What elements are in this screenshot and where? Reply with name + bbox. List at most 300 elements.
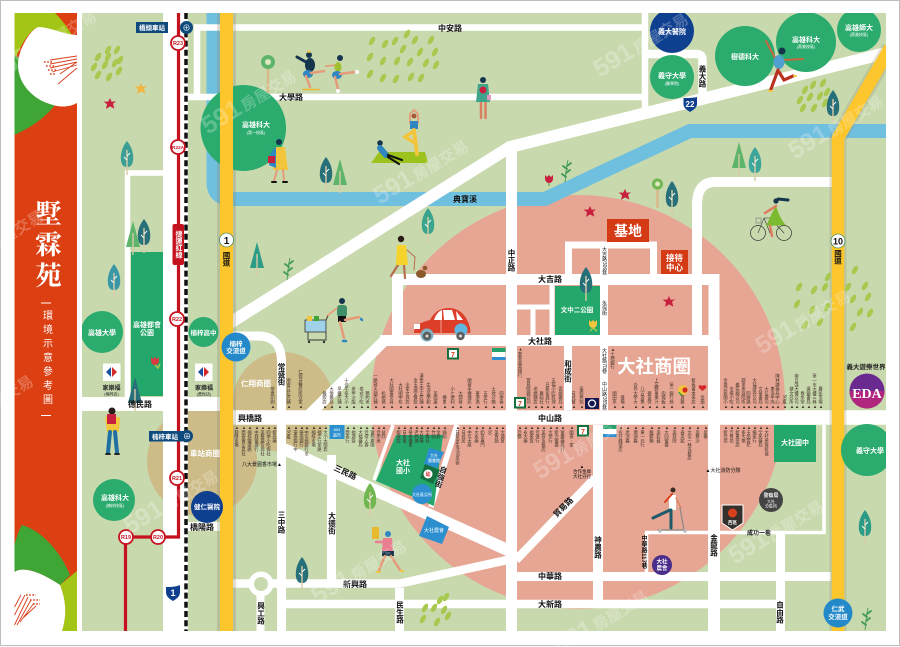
people [105, 41, 803, 572]
icon: Carrefour 鼎悅店: (鼎悅店) [197, 390, 212, 396]
road labels: 神農路 [593, 534, 602, 559]
rail station: 橋頭車站: 橋頭車站 [139, 23, 166, 32]
road labels: 中正路 [507, 247, 516, 272]
icon: 警察局: 分駐所 [765, 502, 777, 508]
station R23 [171, 36, 185, 50]
road labels: 中安路 [438, 23, 462, 33]
road labels: 合作金庫 [573, 468, 591, 475]
shop list north of Zhongshan Rd: 上品鮮果果汁▲ [654, 377, 660, 409]
shop list north of Zhongshan Rd: 春水堂▲ [800, 390, 806, 409]
shop list north of Zhongshan Rd: 寶島眼鏡公司▲ [526, 377, 532, 409]
shop list south of Zhongshan Rd: ▲虎河鑫 [625, 425, 630, 444]
watermarks: 591房屋交易 [196, 60, 301, 140]
shop list north of Zhongshan Rd: 蛋糕烘焙▲ [579, 386, 584, 409]
zone label: 車站商圈: 車站商圈 [190, 448, 220, 458]
shop list south of Zhongshan Rd: ▲美食鍋 [494, 425, 500, 444]
roundabout [248, 572, 274, 596]
shield: national highway 10 [831, 234, 845, 266]
building: 大社圖書館 [424, 448, 444, 468]
campus: 高雄科大 燕巢校區 [776, 12, 836, 72]
shop list north of Zhongshan Rd: 五金行▲ [483, 391, 488, 409]
shop list south of Zhongshan Rd: ▲大昌藥 [419, 425, 424, 444]
shield: route 22 [684, 97, 697, 112]
shop list south of Zhongshan Rd: ▲新佳坊 [723, 425, 728, 444]
river: 典寶溪 [214, 13, 886, 199]
shop list south of Zhongshan Rd: ▲大福藥局 [358, 425, 364, 449]
shop list north of Zhongshan Rd: 藍色書本來店▲ [691, 377, 696, 409]
road labels: 中華路117巷 [640, 534, 647, 569]
shop list south of Zhongshan Rd: ▲美髮沙 [695, 425, 700, 443]
shop list north of Zhongshan Rd: 仁德牙醫診所宜家▲ [298, 368, 304, 409]
campus: 義守大學 醫學院: 義守大學 [658, 71, 686, 80]
shop list south of Zhongshan Rd: ▲楠梓鐵道路 [247, 425, 252, 453]
left banner [14, 13, 77, 631]
school: 大社國小: 國小 [396, 466, 410, 475]
shop list north of Zhongshan Rd: 道場▲ [620, 394, 626, 409]
person: skateboarder [297, 50, 324, 90]
shop list north of Zhongshan Rd: 四維路▲ [746, 391, 752, 409]
shop list north of Zhongshan Rd: 簡約美▲ [365, 390, 370, 409]
shop list south of Zhongshan Rd: ▲日新堂生活50美容 [455, 425, 460, 466]
trees [108, 90, 871, 591]
shop list south of Zhongshan Rd: ▲全民藥局 [758, 425, 764, 449]
flower top: white petals [18, 27, 77, 107]
shop list north of Zhongshan Rd: 松柏嶺▲ [381, 390, 386, 409]
shop list north of Zhongshan Rd: 土地公廟▲ [491, 386, 496, 409]
icon: flower shop logo [678, 385, 688, 395]
school: 大社國中: 大社國中 [781, 438, 809, 447]
shop list south of Zhongshan Rd: ▲佳禾美 [376, 425, 382, 444]
park: 高雄都會公園 [131, 252, 163, 396]
shop list south of Zhongshan Rd: ▲中興電器行 [254, 425, 260, 453]
shop list south of Zhongshan Rd: ▲新力電器 [554, 425, 560, 449]
shield: route 1: 1 [170, 588, 176, 598]
station R19 [119, 530, 133, 544]
shield: route 22: 22 [686, 100, 695, 109]
shop list north of Zhongshan Rd: 四季春▲ [499, 391, 504, 409]
building: 大社區公所 [412, 484, 432, 504]
icon: 854超市: 854 [334, 427, 341, 432]
shop list north of Zhongshan Rd: ▲安泰商業銀行 [517, 346, 523, 379]
person: woman in blue jacket [268, 139, 288, 182]
shop list south of Zhongshan Rd: ▲中信大廈 [467, 425, 472, 448]
campus: 義守大學 [841, 424, 886, 476]
campus: 高雄師大 燕巢校區: 高雄師大 [845, 23, 873, 32]
station R23: R23 [173, 41, 183, 47]
icon: 大社農會: 大社 [656, 558, 668, 566]
campus: 高雄科大 楠梓校區 [93, 479, 135, 521]
site marker: 基地 [607, 219, 649, 242]
icon: police badge 大社消防分隊: 西區 [728, 520, 737, 526]
shield: national highway 10: 國道 [833, 249, 842, 266]
icon: 854超市 [330, 425, 344, 439]
shop list south of Zhongshan Rd: ▲大信一巷洗髮店 [687, 425, 692, 462]
shop list south of Zhongshan Rd: ▲多大樂 [741, 425, 746, 444]
shop list south of Zhongshan Rd: ▲鼎泰行 [345, 425, 350, 444]
shop list north of Zhongshan Rd: 一路發火鍋店鋪▲ [373, 374, 378, 409]
shop list north of Zhongshan Rd: 國田米▲ [612, 391, 618, 409]
building: 大社農會: 大社農會 [424, 527, 444, 534]
shop list south of Zhongshan Rd: ▲吉食坊 [729, 425, 734, 444]
road labels: 金龍路 [709, 532, 718, 557]
road labels: 自由路 [775, 599, 784, 624]
shop list south of Zhongshan Rd: ▲華南銀行 [299, 425, 304, 449]
tan zone: 仁翔商圈 [233, 352, 333, 452]
shop list north of Zhongshan Rd: 第一銀行商▲ [669, 381, 674, 409]
shield: national highway 1 [220, 233, 234, 268]
park: 高雄都會公園: 公園 [140, 328, 154, 337]
shop list south of Zhongshan Rd: ▲佳達行 [535, 425, 540, 444]
metro red line [126, 13, 178, 631]
shopping cart [305, 316, 328, 343]
shop list north of Zhongshan Rd: 陳林牌藥局中心▲ [775, 373, 780, 409]
shop list north of Zhongshan Rd: 金蘭▲ [700, 394, 706, 409]
road labels: 自強街 [433, 464, 449, 490]
person: woman with book [105, 408, 120, 454]
shop list north of Zhongshan Rd: 日新家具行▲ [545, 382, 550, 409]
shop list south of Zhongshan Rd: ▲50嵐 [286, 425, 292, 441]
interchange: 仁武交流道: 仁武 [832, 604, 845, 613]
school: 大社國中 [774, 425, 816, 462]
icon: 7-Eleven south: 7 [581, 429, 585, 436]
watermarks: 591房屋交易 [306, 530, 411, 610]
road labels: 中山路 [538, 413, 562, 423]
subtitle: 環境示意參考圖 [40, 310, 52, 408]
shop list north of Zhongshan Rd: 餐飲店▲ [322, 390, 328, 409]
icon: Carrefour 鼎悅店: 家樂福 [195, 384, 213, 392]
campus: 義守大學: 義守大學 [856, 446, 884, 455]
watermarks: 591房屋交易 [528, 405, 633, 485]
station R20: R20 [153, 535, 163, 541]
shop list south of Zhongshan Rd: ▲富康藥局行 [560, 425, 566, 453]
flower top: green leaf [14, 55, 55, 135]
flower bottom: green leaf [14, 525, 70, 585]
building: 大社圖書館: 大社 [430, 452, 438, 458]
shop list north of Zhongshan Rd: 合作大學大▲ [633, 381, 638, 409]
rail station: 楠梓車站 [149, 430, 193, 442]
title: 墅霖苑 [31, 200, 61, 292]
shop list south of Zhongshan Rd: ▲國泰．家 [569, 425, 574, 448]
shop list north of Zhongshan Rd: 老媽麵店▲ [533, 386, 538, 409]
school: 楠梓高中 [188, 317, 218, 347]
icon: EDA theme park: 義大遊樂世界 [846, 362, 886, 371]
road labels: 新興路 [343, 579, 367, 589]
road labels: 大社路70巷 [601, 348, 607, 374]
shop list north of Zhongshan Rd: 早餐店舖▲ [337, 387, 342, 409]
station R21 [170, 471, 184, 485]
tan zone: 車站商圈 [147, 406, 257, 516]
watermarks: 591房屋交易 [588, 3, 693, 83]
shop list south of Zhongshan Rd: ▲興隆市場 [234, 425, 240, 449]
station R22A: R22A [172, 145, 185, 151]
shop list south of Zhongshan Rd: ▲大榮行 [548, 425, 554, 444]
shop list south of Zhongshan Rd: ▲亞都 [517, 425, 522, 440]
watermarks: 591房屋交易 [118, 460, 223, 540]
campus: 高雄科大 第一校區: (第一校區) [247, 129, 266, 135]
person: roller skater [326, 55, 359, 93]
station R22A [171, 140, 185, 154]
shop list north of Zhongshan Rd: 大福證券公司▲ [752, 377, 758, 409]
shop list south of Zhongshan Rd: ▲福全行家路 [317, 425, 322, 453]
shop list north of Zhongshan Rd: 美而康▲ [433, 390, 438, 409]
shop list north of Zhongshan Rd: 十佳牛排大小▲ [344, 377, 350, 409]
station R22 [170, 312, 184, 326]
sales centre marker: 接待中心: 中心 [666, 262, 683, 272]
shop list north of Zhongshan Rd: 金善武術國小▲ [723, 377, 728, 409]
icon: 警察局 [759, 488, 783, 512]
white rail corridor [163, 13, 188, 631]
metro red line label: 捷運紅線 [175, 230, 182, 259]
shop list south of Zhongshan Rd: ▲福源齋 [351, 425, 356, 444]
campus: 高雄科大 楠梓校區: 高雄科大 [101, 493, 129, 502]
road labels: 貿易路 [551, 495, 575, 519]
shop list south of Zhongshan Rd: ▲美容院 [672, 425, 678, 444]
campus: 義守大學 醫學院 [650, 55, 694, 99]
road labels [128, 23, 784, 625]
stars [104, 98, 675, 307]
road labels: 和成街 [563, 358, 572, 383]
school: 大社國小: 大社 [396, 458, 410, 467]
campus: 高雄科大 第一校區: 高雄科大 [242, 120, 270, 129]
icon: police badge 大社消防分隊 [722, 505, 743, 530]
shop list south of Zhongshan Rd: ▲四季小吃商社 [266, 425, 272, 457]
shop list south of Zhongshan Rd: ▲包仔峰號店 [618, 425, 624, 453]
hospital: 健仁醫院 [191, 491, 223, 523]
zone label: 大社商圈: 大社商圈 [617, 356, 691, 377]
station R19: R19 [121, 535, 131, 541]
shop list north of Zhongshan Rd: 金玉滿堂餐飲▲ [413, 377, 418, 409]
school: 大社國小 [376, 435, 443, 506]
shop list south of Zhongshan Rd: ▲永大藥 [523, 425, 528, 444]
hospital: 義大醫院: 義大醫院 [658, 27, 686, 36]
station R20 [151, 530, 165, 544]
road labels: 大社分行 [573, 473, 591, 480]
interchange: 楠梓交流道: 楠梓 [230, 339, 243, 348]
shop list north of Zhongshan Rd: 順安豆花店鋪▲ [286, 378, 292, 409]
shop list north of Zhongshan Rd: 農民市場▲ [818, 386, 824, 409]
shop list south of Zhongshan Rd: ▲美髮廣告商社 [260, 425, 266, 457]
shop list south of Zhongshan Rd [234, 425, 769, 466]
road labels: 大學路 [279, 92, 303, 102]
campus: 高雄大學: 高雄大學 [88, 328, 116, 337]
road labels: 大吉路 [538, 274, 562, 284]
watermarks: 591房屋交易 [368, 130, 473, 210]
shop list north of Zhongshan Rd: 大社國中校▲ [398, 381, 404, 409]
rail station: 橋頭車站: ⊕ [182, 24, 190, 32]
rail station: 橋頭車站 [136, 21, 193, 34]
person: woman walking dog [391, 236, 427, 278]
hospital: 健仁醫院: 健仁醫院 [194, 502, 220, 511]
shop list north of Zhongshan Rd: 市場小吃▲ [729, 386, 734, 409]
shop list north of Zhongshan Rd: 麥當勞▲ [647, 390, 652, 409]
shop list south of Zhongshan Rd: ▲日本電 [402, 425, 408, 443]
building: 大社農會 [419, 516, 449, 544]
shop list south of Zhongshan Rd: ▲安泰銀行中 [293, 425, 298, 453]
icon: 7-Eleven north [447, 348, 459, 360]
shop list south of Zhongshan Rd: ▲美彩藝 [656, 425, 662, 444]
shop list north of Zhongshan Rd: 東港漁▲ [475, 390, 480, 409]
flower bottom: stamens [14, 595, 40, 625]
highway markers [166, 97, 845, 601]
road labels: 大社路 [528, 336, 552, 346]
shop list north of Zhongshan Rd: 義民廟公司▲ [735, 381, 740, 409]
metro and rail lines [119, 13, 193, 631]
icon: 大社農會: 農會 [656, 564, 668, 572]
shop list north of Zhongshan Rd: ▲土地銀行 [610, 347, 616, 371]
shop list north of Zhongshan Rd: 寶雅▲ [680, 394, 686, 409]
banner background [14, 13, 77, 631]
person: yoga [405, 110, 418, 154]
zone label: 仁翔商圈: 仁翔商圈 [241, 378, 271, 388]
shop list north of Zhongshan Rd: 全家文具店▲ [405, 382, 410, 409]
person: woman with bag [372, 527, 403, 572]
shop list north of Zhongshan Rd: 50嵐▲ [782, 395, 788, 409]
campus: 義守大學 醫學院: (醫學院) [665, 80, 680, 86]
person: man with cart [327, 298, 362, 341]
shop list south of Zhongshan Rd: ▲大同電器 [664, 425, 670, 449]
shop list south of Zhongshan Rd: ▲鮮饌聯 [649, 425, 654, 444]
icon: Carrefour 楠梓店 [102, 364, 121, 396]
shop list north of Zhongshan Rd: 機車▲ [442, 394, 448, 409]
shield: national highway 1: 國道 [222, 251, 231, 268]
road labels: 大新路 [538, 599, 562, 609]
shop list south of Zhongshan Rd: ▲大永藥 [474, 425, 480, 444]
shop list south of Zhongshan Rd: ▲金飾 [436, 425, 442, 440]
shop list north of Zhongshan Rd [270, 346, 823, 409]
sales centre marker: 接待中心: 接待 [666, 253, 683, 263]
person: scooter rider [653, 488, 687, 533]
shop list north of Zhongshan Rd: 第一市大樓三巷▲ [812, 373, 818, 409]
building: 大社圖書館: 圖書館 [428, 457, 440, 463]
campus: 高雄科大 燕巢校區: (燕巢校區) [797, 43, 816, 49]
campus: 樹德科大: 樹德科大 [731, 52, 759, 61]
station R21: R21 [172, 476, 182, 482]
shop list north of Zhongshan Rd: 大社圖書文具▲ [389, 377, 394, 409]
hospital: 義大醫院 [650, 9, 694, 53]
icon: FamilyMart north [492, 348, 506, 360]
shield: route 1 [166, 585, 180, 601]
road labels: 大吉路306巷 [601, 246, 607, 276]
sprouts [284, 160, 871, 630]
icon: EDA theme park [846, 362, 886, 408]
metro red line label [172, 224, 184, 265]
shop list south of Zhongshan Rd: ▲新光藥 [272, 425, 278, 444]
road labels: ▲大社消防分隊 [706, 467, 740, 474]
shop list north of Zhongshan Rd: 肉燥飯▲ [661, 390, 666, 409]
interchange: 楠梓交流道 [222, 332, 250, 362]
road labels: 德民路 [128, 399, 152, 409]
shield: national highway 10: 10 [833, 236, 843, 246]
school: 楠梓高中: 楠梓高中 [190, 328, 216, 337]
shop list north of Zhongshan Rd: 順發手機通訊▲ [467, 378, 472, 409]
shop list south of Zhongshan Rd: ▲竹園 [431, 425, 436, 440]
shop list north of Zhongshan Rd: 大潤發▲ [458, 390, 464, 409]
highway 1 [217, 13, 236, 631]
shop list south of Zhongshan Rd: ▲奶茶專門 [480, 425, 486, 449]
icon: 7-Eleven middle: 7 [518, 401, 522, 408]
road labels: 典寶溪 [453, 194, 477, 204]
icon: EDA theme park: EDA [852, 387, 883, 402]
yoga mat [371, 152, 428, 163]
road labels: 成功一巷 [747, 529, 771, 537]
shop list south of Zhongshan Rd: ▲佳得人壽 [364, 425, 370, 449]
shop list south of Zhongshan Rd: ▲華泰機車 [408, 425, 414, 449]
shop list north of Zhongshan Rd: 文華書局▲ [758, 386, 764, 409]
park: 文中二公園: 文中二公園 [561, 305, 594, 314]
shield: national highway 1: 1 [224, 236, 230, 247]
shop list south of Zhongshan Rd: ▲楊家行 [752, 425, 758, 444]
road labels: 八大景園香市場▲ [242, 461, 282, 468]
road labels: 永保街 [601, 300, 607, 317]
tulips [151, 175, 597, 368]
shop list north of Zhongshan Rd: 鄰里美容院所▲ [741, 377, 746, 409]
watermarks: 591房屋交易 [723, 490, 828, 570]
shop list south of Zhongshan Rd: ▲泰美妝 [680, 425, 686, 444]
shop list south of Zhongshan Rd: ▲全聯社 [425, 425, 430, 444]
orange star [135, 83, 147, 94]
road labels: 中華路 [538, 571, 562, 581]
shop list south of Zhongshan Rd: ▲益欣 [381, 425, 386, 440]
shop list north of Zhongshan Rd: 大信壽司▲ [764, 386, 770, 409]
interchange: 仁武交流道: 交流道 [828, 612, 848, 621]
shop list south of Zhongshan Rd: ▲大滿意 [500, 425, 506, 443]
icon: Carrefour 楠梓店: 家樂福 [102, 384, 121, 392]
icon: Carrefour 鼎悅店 [195, 364, 213, 396]
icon: bank logo [585, 398, 599, 409]
icon: Carrefour 楠梓店: (楠梓店) [104, 390, 119, 396]
road labels: 三中路 [277, 511, 286, 534]
icon: 7-Eleven north: 7 [451, 352, 455, 359]
shop list south of Zhongshan Rd: ▲鼎泰豐企業社 [241, 425, 246, 457]
icon: heart logo [699, 385, 706, 391]
shop list south of Zhongshan Rd: ▲中信商銀行市 [304, 425, 310, 457]
icon: 警察局: 大社 [767, 498, 775, 504]
building: 幼兒園: 幼 [425, 471, 431, 478]
site marker: 基地: 基地 [614, 223, 642, 239]
campus: 樹德科大 [715, 26, 775, 86]
rail line (dashed) [184, 13, 188, 631]
shop list south of Zhongshan Rd: ▲楠梓市場 [311, 425, 316, 449]
shop list south of Zhongshan Rd: ▲日式居 [461, 425, 466, 444]
car [414, 308, 470, 342]
shop list south of Zhongshan Rd: ▲早餐 [703, 425, 708, 440]
road labels: 興工路 [256, 600, 266, 625]
flower top: lime leaf [14, 13, 72, 62]
building: 大社區公所: 大社區公所 [412, 491, 432, 497]
road labels: 大德街 [327, 510, 336, 535]
road labels: 義大路 [698, 63, 707, 88]
shop list north of Zhongshan Rd: 南自強大樓公司▲ [794, 373, 800, 409]
icon: 警察局: 警察局 [763, 492, 779, 499]
icon: 854超市: 超市 [333, 432, 341, 438]
shop list north of Zhongshan Rd: 日式餐▲ [571, 391, 576, 409]
shop list north of Zhongshan Rd: 舞蹈社▲ [539, 390, 544, 409]
shop list south of Zhongshan Rd: ▲50 [488, 425, 492, 435]
highway 10 [838, 48, 890, 631]
interchange: 楠梓交流道: 交流道 [226, 346, 246, 355]
shop list south of Zhongshan Rd: ▲富邦產險 [370, 425, 376, 449]
flower bottom: lime leaf [60, 571, 77, 631]
person: woman with flower [476, 77, 491, 118]
shop list south of Zhongshan Rd: ▲大小大眼影 [323, 425, 328, 453]
sales centre marker: 接待中心 [661, 250, 688, 274]
shop list north of Zhongshan Rd: 小七便利▲ [450, 386, 456, 409]
shop list south of Zhongshan Rd: ▲東一元行 [640, 425, 646, 449]
shop list north of Zhongshan Rd: 連鎖書局▲ [806, 386, 812, 409]
person: photographer on mat [377, 140, 402, 164]
shop list north of Zhongshan Rd: 泰式小吃▲ [359, 386, 364, 409]
interchange: 仁武交流道 [824, 598, 852, 628]
